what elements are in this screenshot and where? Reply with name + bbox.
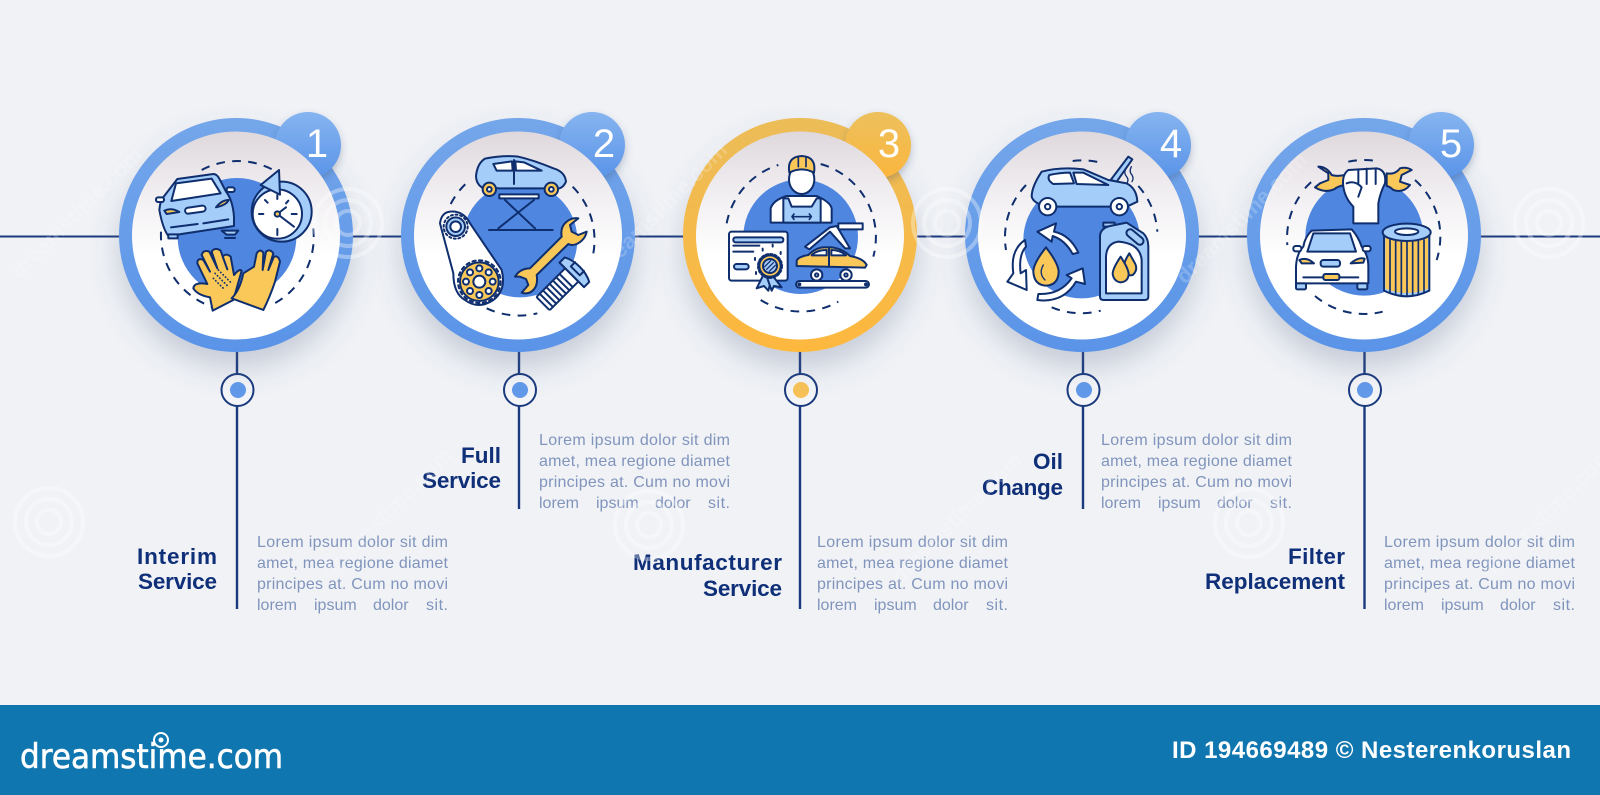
text block 2 — [539, 432, 731, 512]
connector line 3 — [785, 350, 817, 609]
logo: dreamstime.com: dreamstime.com — [20, 737, 283, 777]
number 4: 4 — [1160, 122, 1182, 166]
ring 1 — [119, 118, 353, 352]
badge 4 — [1125, 112, 1191, 178]
step 5 — [1205, 112, 1576, 614]
text block 4: lorem — [1101, 495, 1141, 512]
inner disc 5 — [1260, 132, 1468, 340]
text block 1: ipsum — [314, 597, 357, 614]
inner disc 4 — [978, 132, 1186, 340]
icon: mechanic, certificate and car assembly — [727, 156, 876, 312]
title: Filter Replacement: Replacement — [1205, 569, 1346, 594]
inner disc 2 — [414, 132, 622, 340]
step 3 — [633, 112, 1009, 614]
text block 2: amet, mea regione diamet — [539, 453, 731, 470]
number 5: 5 — [1440, 122, 1462, 166]
connector line 1 — [222, 350, 254, 609]
text block 4: ipsum — [1158, 495, 1201, 512]
ring 2 — [401, 118, 635, 352]
text block 4 — [1101, 432, 1293, 512]
inner disc 1 — [132, 132, 340, 340]
title: Oil Change — [982, 449, 1063, 500]
watermark overlay: dreamstime.com — [591, 137, 732, 279]
text block 5: Lorem ipsum dolor sit dim — [1384, 534, 1575, 551]
footer banner — [0, 705, 1600, 795]
text block 1: lorem — [257, 597, 297, 614]
icon: lift, belt, wrench and bolt — [440, 156, 595, 316]
text block 5: lorem — [1384, 597, 1424, 614]
text block 4: dolor — [1217, 495, 1253, 512]
watermark overlay — [6, 137, 1600, 589]
text block 2: Lorem ipsum dolor sit dim — [539, 432, 730, 449]
text block 5: principes at. Cum no movi — [1384, 576, 1575, 593]
text block 1: amet, mea regione diamet — [257, 555, 449, 572]
text block 4: Lorem ipsum dolor sit dim — [1101, 432, 1292, 449]
watermark overlay: dreamstime.com — [886, 447, 1027, 589]
title: Interim Service — [137, 544, 217, 594]
title: Manufacturer Service: Service — [703, 576, 782, 601]
number 2: 2 — [593, 122, 615, 166]
image id and author: ID 194669489 © Nesterenkoruslan — [1172, 737, 1571, 764]
text block 3: Lorem ipsum dolor sit dim — [817, 534, 1008, 551]
step 2 — [401, 112, 731, 512]
text block 4: principes at. Cum no movi — [1101, 474, 1292, 491]
text block 3: principes at. Cum no movi — [817, 576, 1008, 593]
text block 5 — [1384, 534, 1576, 614]
badge 3 — [845, 112, 911, 178]
title: Manufacturer Service — [633, 550, 782, 601]
ring 5 — [1247, 118, 1481, 352]
text block 2: sit. — [708, 495, 730, 512]
text block 2: lorem — [539, 495, 579, 512]
title: Manufacturer Service: Manufacturer — [633, 550, 782, 575]
text block 5: amet, mea regione diamet — [1384, 555, 1576, 572]
watermark overlay: dreamstime.com — [1171, 147, 1312, 289]
step 4 — [965, 112, 1293, 512]
text block 3: lorem — [817, 597, 857, 614]
title: Interim Service: Interim — [137, 544, 217, 569]
text block 3: ipsum — [874, 597, 917, 614]
title: Filter Replacement: Filter — [1288, 544, 1345, 569]
text block 1: principes at. Cum no movi — [257, 576, 448, 593]
text block 4: sit. — [1270, 495, 1292, 512]
title: Oil Change: Change — [982, 475, 1063, 500]
badge 2 — [559, 112, 625, 178]
number 3: 3 — [878, 122, 900, 166]
text block 2: ipsum — [596, 495, 639, 512]
icon: car, clock and gloves — [156, 161, 314, 311]
ring 3 — [683, 118, 917, 352]
text block 2: principes at. Cum no movi — [539, 474, 730, 491]
connector line 2 — [504, 350, 536, 509]
text block 3: sit. — [986, 597, 1008, 614]
text block 3: amet, mea regione diamet — [817, 555, 1009, 572]
connector line 5 — [1349, 350, 1381, 609]
title: Full Service: Service — [422, 468, 501, 493]
text block 1: dolor — [373, 597, 409, 614]
title: Full Service — [422, 443, 501, 493]
text block 1 — [257, 534, 449, 614]
text block 5: dolor — [1500, 597, 1536, 614]
title: Oil Change: Oil — [1033, 449, 1063, 474]
connector line 4 — [1068, 350, 1100, 509]
text block 4: amet, mea regione diamet — [1101, 453, 1293, 470]
title: Interim Service: Service — [138, 569, 217, 594]
text block 3: dolor — [933, 597, 969, 614]
text block 5: ipsum — [1441, 597, 1484, 614]
horizontal timeline — [0, 236, 1600, 238]
watermark overlay: dreamstime.com — [6, 142, 147, 284]
title: Full Service: Full — [461, 443, 501, 468]
watermark overlay: dreamstime.com — [316, 442, 457, 584]
inner disc 3 — [696, 132, 904, 340]
text block 1: sit. — [426, 597, 448, 614]
text block 1: Lorem ipsum dolor sit dim — [257, 534, 448, 551]
step 1 — [119, 112, 449, 614]
text block 5: sit. — [1553, 597, 1575, 614]
title: Filter Replacement — [1205, 544, 1346, 594]
number 1: 1 — [306, 122, 328, 166]
icon: car, oil cycle and canister — [1005, 157, 1157, 313]
text block 3 — [817, 534, 1009, 614]
text block 2: dolor — [655, 495, 691, 512]
badge 1 — [275, 112, 341, 178]
icon: fist with wrench, car and oil filter — [1287, 160, 1440, 314]
ring 4 — [965, 118, 1199, 352]
badge 5 — [1408, 112, 1474, 178]
